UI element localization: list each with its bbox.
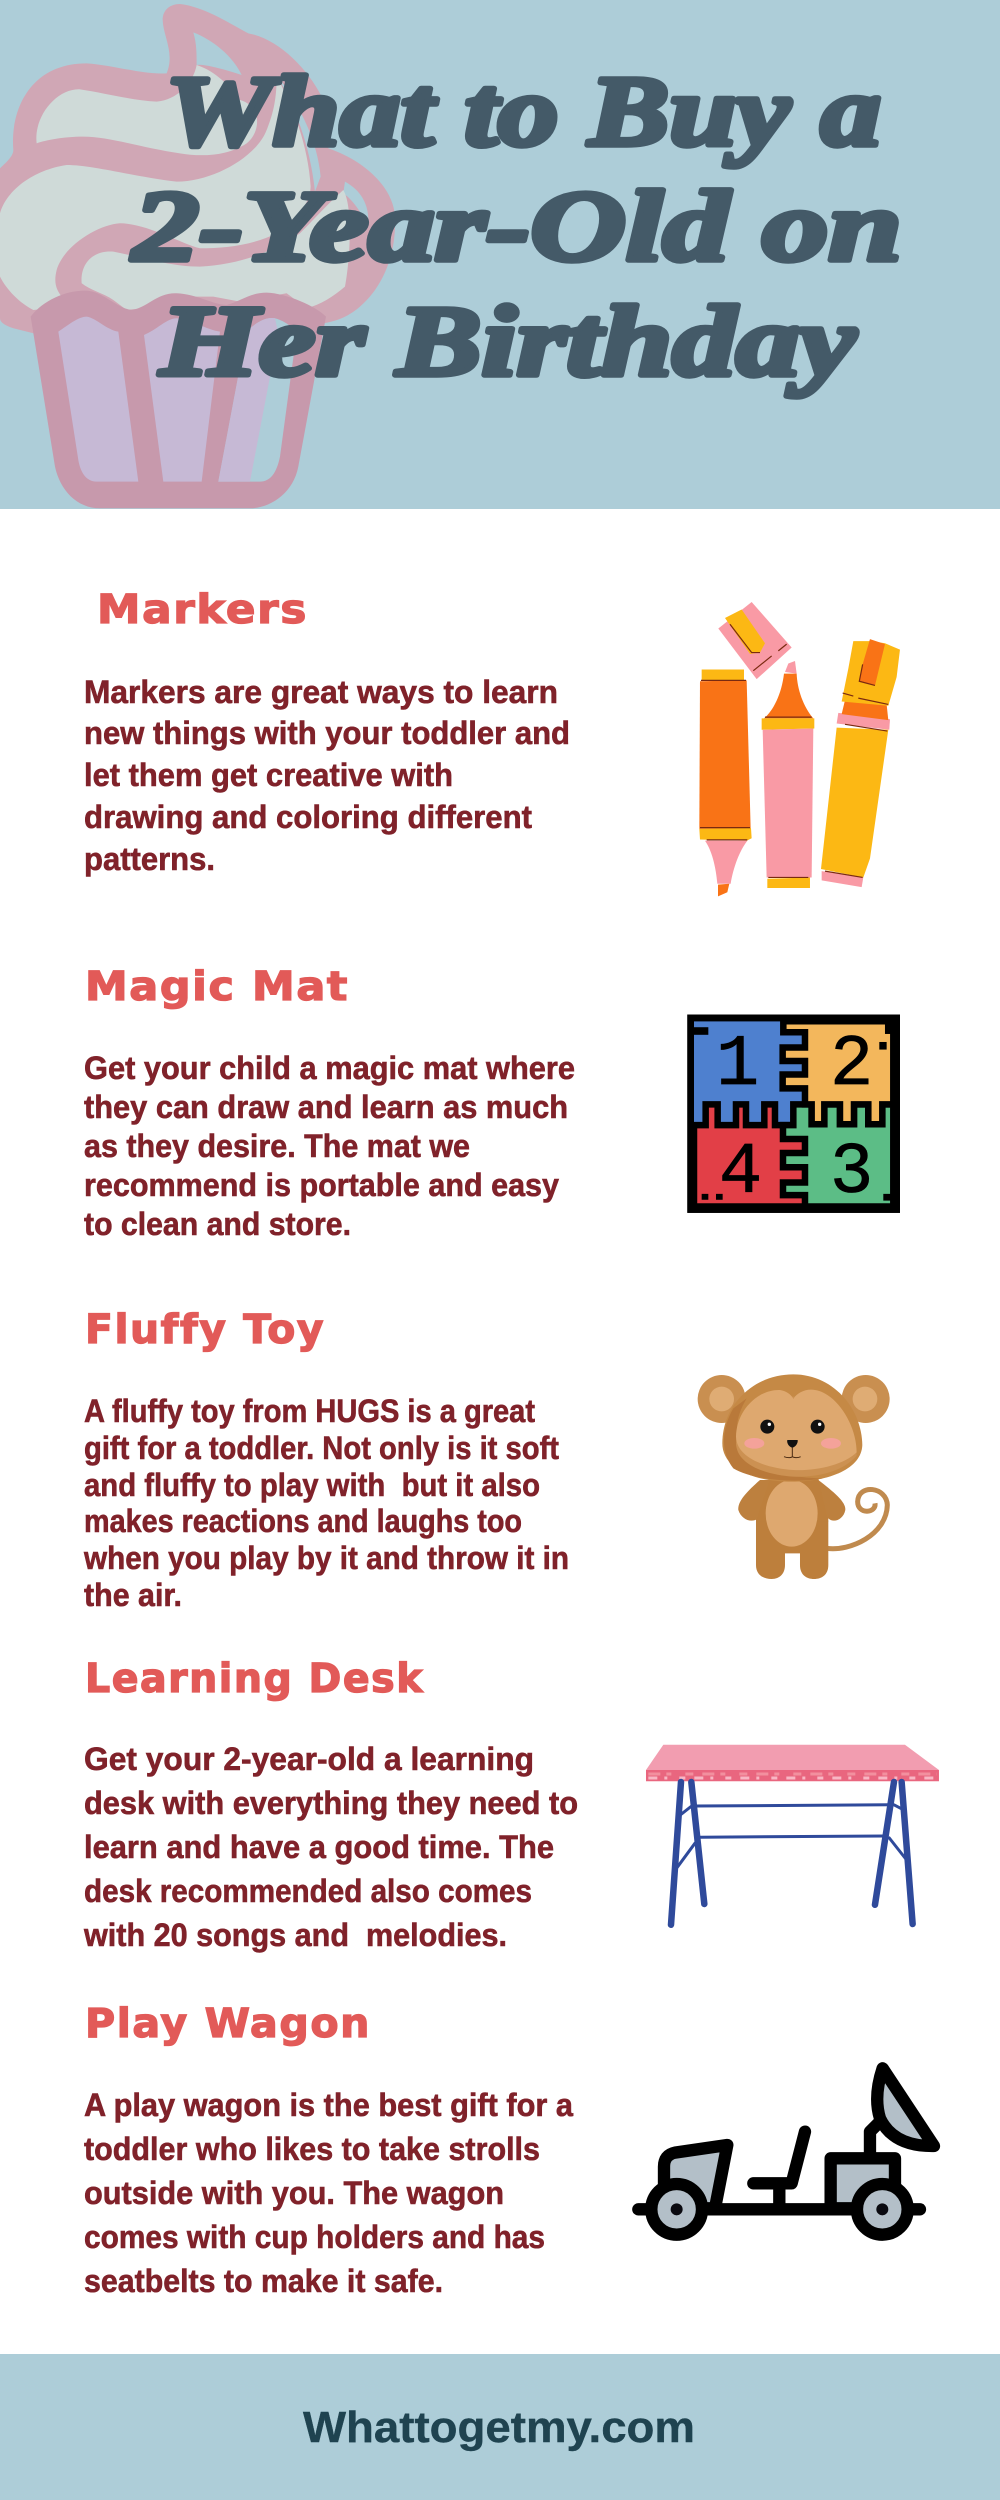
text block: learning desk [83,1741,578,1953]
icon: numbered puzzle mat [687,1015,900,1214]
text block: markers: new things with your toddler and [84,715,570,751]
panel: footer [0,2354,1000,2500]
title [130,55,902,397]
panel: header [0,0,1000,509]
footer website text: Whattogetmy.com [303,2403,695,2452]
text block: fluffy toy: the air. [84,1577,182,1613]
panel: play wagon text [84,2001,573,2299]
icon: monkey toy [698,1374,890,1579]
text block: play wagon [84,2087,573,2299]
panel: markers text [84,587,570,877]
text block: markers: Markers are great ways to learn [84,674,558,710]
text block: fluffy toy [83,1393,569,1613]
text block: fluffy toy: and fluffy to play with but it also [84,1467,540,1503]
text block: play wagon: A play wagon is the best gift for a [84,2087,573,2123]
text block: markers: drawing and coloring different [84,799,532,835]
title: 2-Year-Old on [130,170,902,282]
text block: fluffy toy: when you play by it and throw it in [83,1540,569,1576]
text block: magic mat: recommend is portable and easy [84,1167,559,1203]
icon: play wagon [638,2068,934,2235]
panel: learning desk text [83,1656,578,1953]
icon: numbered puzzle mat: 2 [830,1024,873,1106]
text block: play wagon: toddler who likes to take strolls [84,2131,540,2167]
text block: learning desk: desk recommended also comes [84,1873,532,1909]
icon: numbered puzzle mat: 4 [719,1132,762,1214]
text block: fluffy toy: gift for a toddler. Not only is it soft [84,1430,559,1466]
text block: learning desk: desk with everything they need to [84,1785,578,1821]
heading: learning desk: Learning Desk [85,1656,424,1702]
icon: markers [699,602,900,896]
text block: learning desk: with 20 songs and melodies. [83,1917,507,1953]
text block: markers: let them get creative with [84,757,453,793]
heading: fluffy toy: Fluffy Toy [85,1307,325,1353]
text block: learning desk: Get your 2-year-old a learning [84,1741,534,1777]
text block: play wagon: seatbelts to make it safe. [84,2263,443,2299]
heading: markers: Markers [97,587,308,633]
text block: play wagon: comes with cup holders and has [84,2219,545,2255]
heading: play wagon: Play Wagon [85,2001,371,2047]
text block: magic mat: they can draw and learn as much [84,1089,568,1125]
text block: magic mat: to clean and store. [84,1206,351,1242]
text block: play wagon: outside with you. The wagon [84,2175,504,2211]
title: Her Birthday [159,285,857,397]
text block: markers [84,674,570,877]
icon: numbered puzzle mat: 1 [716,1024,759,1106]
text block: magic mat: as they desire. The mat we [84,1128,470,1164]
text block: magic mat [84,1050,575,1242]
text block: fluffy toy: A fluffy toy from HUGS is a great [84,1393,535,1429]
icon: desk [646,1745,939,1925]
panel: fluffy toy text [83,1307,569,1613]
icon: cupcake [0,4,395,508]
text block: magic mat: Get your child a magic mat where [84,1050,575,1086]
heading: magic mat: Magic Mat [85,964,349,1010]
text block: markers: patterns. [84,841,215,877]
text block: learning desk: learn and have a good time. The [84,1829,554,1865]
text block: fluffy toy: makes reactions and laughs too [84,1503,522,1539]
icon: numbered puzzle mat: 3 [830,1132,873,1214]
panel: magic mat text [84,964,575,1242]
title: What to Buy a [165,55,881,167]
